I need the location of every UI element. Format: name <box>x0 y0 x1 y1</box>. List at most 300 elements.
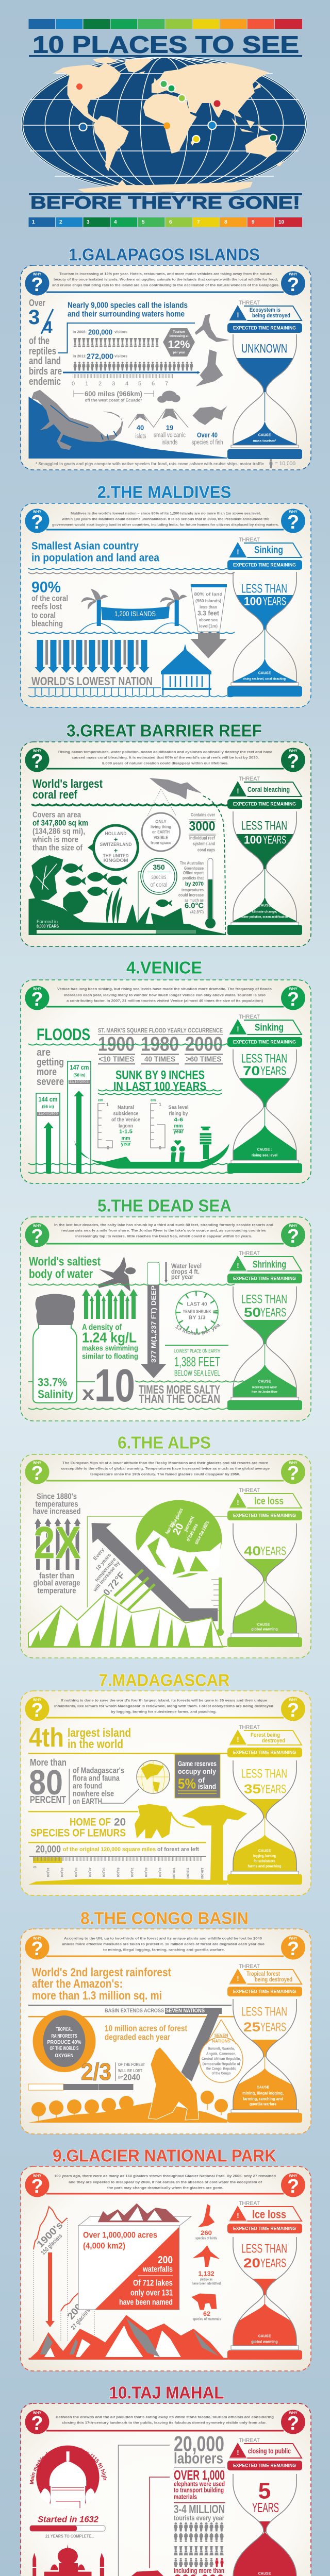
ground and iguana <box>28 390 227 459</box>
threat and hourglass: CAUSE <box>258 434 271 437</box>
forest remaining ruler: 40,000 <box>88 1868 91 1877</box>
forest remaining ruler: 80,000 <box>144 1868 147 1877</box>
two thirds stat: OF THE FOREST <box>118 2062 145 2067</box>
why banner: WHY <box>289 510 298 514</box>
heading: 7 Madagascar: 7.MADAGASCAR <box>99 1670 230 1690</box>
why banner: beauty of the once isolated islands. Workers smuggling animals to the islands that compete with the local wildlife for food, <box>54 278 278 281</box>
headline: World's 2nd largest rainforest <box>32 1965 171 1979</box>
hexagon: tourism increasing: Tourism <box>173 331 185 334</box>
2X temperatures: temperatures <box>35 1500 78 1509</box>
salt shaker: 33.7% <box>38 1376 67 1389</box>
threat and hourglass: YEARS <box>260 1545 286 1558</box>
forest remaining ruler: 70,000 <box>130 1868 133 1877</box>
clock: shrunk by a third: 13 inches per year <box>175 1324 221 1335</box>
why banner: and they are expected to disappear by 2030, if not earlier. In the absence of cold water the ecosystem of <box>69 2180 262 2184</box>
panel: Venice <box>21 980 311 1183</box>
threat and hourglass <box>227 1014 302 1173</box>
threat and hourglass: 50 <box>244 1306 261 1320</box>
4th largest island: largest island <box>68 1726 131 1739</box>
threat and hourglass: CAUSE <box>258 1850 271 1853</box>
rocket and dashed path <box>147 778 225 935</box>
water line <box>28 1044 235 1045</box>
park size box: (4,000 km2) <box>83 2241 125 2250</box>
speech oval: countries: KINGDOM <box>103 858 128 863</box>
stat: 3000 reef systems: individual reef <box>189 836 216 841</box>
clock: shrunk by a third: BY 1/3 <box>189 1315 206 1321</box>
circle: visible from space: from space <box>151 841 172 845</box>
threat and hourglass: destroyed <box>262 1738 285 1744</box>
threat and hourglass: CAUSE <box>258 2335 271 2338</box>
stat: three quarters endemic: birds are <box>29 366 62 377</box>
panel: The Alps <box>21 1454 311 1658</box>
forest remaining ruler: of the original 120,000 square miles <box>63 1846 156 1853</box>
clock: shrunk by a third: YEARS SHRUNK <box>183 1310 211 1314</box>
alpine mountains <box>28 1595 227 1647</box>
heading: 4 Venice: 4.VENICE <box>126 958 202 977</box>
threat and hourglass: Ice loss <box>254 1496 284 1507</box>
stat: 3000 reef systems: 3000 <box>189 819 216 834</box>
why banner: Rising ocean temperatures, water pollution, ocean acidification and cyclones continually destroy the reef and have <box>58 750 272 754</box>
headline: coral reef <box>32 788 77 801</box>
subsidence scales: 1 <box>106 1102 109 1107</box>
forest degraded text: degraded each year <box>105 2032 170 2042</box>
threat and hourglass: YEARS <box>260 2021 286 2034</box>
globe <box>137 1760 170 1793</box>
game reserves box: 5% <box>178 1775 196 1792</box>
numbered legend bar: 1 <box>32 219 35 225</box>
why banner: ? <box>31 2176 43 2197</box>
threat and hourglass: YEARS <box>260 1783 286 1796</box>
gondola <box>73 1127 229 1168</box>
why banner: inhabitants, like lemurs for which Madagascar is renowned, along with them. Forest ecosystems are being destroyed <box>54 1704 273 1708</box>
seven nations oval <box>200 2020 243 2082</box>
laborers and tourists stats: elephants were used <box>174 2480 225 2487</box>
threat and hourglass: farms and poaching <box>248 1865 282 1868</box>
heading: 6 The Alps: 6.THE ALPS <box>118 1433 211 1452</box>
stat: three quarters endemic <box>28 298 195 387</box>
threat and hourglass: EXPECTED TIME REMAINING <box>233 1989 296 1994</box>
numbered legend bar: 6 <box>169 219 172 225</box>
flood height columns: (56 in) <box>42 1105 54 1109</box>
threat and hourglass: 100 <box>244 595 262 608</box>
headline <box>32 777 103 801</box>
glacier text: of their area <box>185 1523 200 1543</box>
why banner: WHY <box>289 749 298 753</box>
park size box: Over 1,000,000 acres <box>83 2230 157 2240</box>
glacier text: percent <box>183 1515 196 1533</box>
footnote and legend: * Smuggled in goats and pigs compete with native species for food, rats come ashore with cruise ships, motor traffic <box>36 461 264 466</box>
why banner: 100 years ago, there were as many as 150 glaciers strewn throughout Glacier National Park. By 2005, only 27 remained <box>54 2174 276 2178</box>
depth arrow: 377 M(1,237 FT) DEEP <box>150 1285 157 1363</box>
species headline: and their surrounding waters home <box>68 310 185 318</box>
why banner: WHY <box>33 1698 41 1702</box>
dome illustration: Main marble dome is 35 meters (115 ft) high <box>30 2445 107 2484</box>
big gray arrow <box>91 1523 218 1621</box>
title: 10 PLACES TO SEE <box>32 31 299 58</box>
area text: than the size of <box>32 844 83 852</box>
threat and hourglass: THREAT <box>239 776 260 782</box>
wildlife icons: species of birds <box>195 2237 217 2240</box>
speech oval: countries <box>88 825 138 870</box>
why banner: ? <box>287 1938 299 1960</box>
threat and hourglass: closing to public <box>248 2447 291 2455</box>
threat and hourglass: rising sea level, coral bleaching <box>243 677 286 681</box>
construction timeline: 21 YEARS TO COMPLETE... <box>45 2534 94 2539</box>
threat and hourglass: YEARS <box>263 595 286 608</box>
threat and hourglass: THREAT <box>239 2437 260 2444</box>
threat and hourglass: for subsistence <box>254 1860 275 1863</box>
laborers and tourists stats: 20,000 <box>174 2432 224 2455</box>
arrow text: 0.72°F <box>92 1547 127 1598</box>
why banner: WHY <box>33 1937 41 1940</box>
speech oval: countries: + <box>114 847 118 854</box>
why banner <box>25 986 305 1010</box>
St Mark's Square occurrence: 40 TIMES <box>144 1055 175 1063</box>
St Mark's Square occurrence: >60 TIMES <box>186 1055 222 1063</box>
numbered legend bar: 3 <box>87 219 90 225</box>
headline: more than 1.3 million sq. mi <box>32 1989 162 2002</box>
glacier loss chart: 27 glaciers <box>70 2307 92 2331</box>
panel: Madagascar <box>21 1691 311 1895</box>
threat and hourglass: THREAT <box>239 1250 260 1257</box>
subsidence scales: mm <box>122 1136 130 1142</box>
floods headline: FLOODS <box>37 1025 90 1044</box>
oxygen circle <box>33 2010 96 2072</box>
subsidence scales: cm <box>151 1098 156 1103</box>
2X temperatures: temperature <box>37 1587 76 1595</box>
threat and hourglass: global warming <box>251 1628 278 1631</box>
visitor pictograms <box>73 328 193 371</box>
seven nations oval: of the Congo <box>211 2072 231 2075</box>
threat and hourglass: ! <box>237 1261 239 1269</box>
water level drop: per year <box>171 1273 193 1281</box>
depth arrow <box>141 1262 166 1378</box>
why banner: restaurants nearly a mile from shore. The Jordan River is the lake's sole source and, as surrounding countries <box>61 1229 266 1232</box>
seven nations band and numeral: BASIN EXTENDS ACROSS <box>105 2008 164 2014</box>
sunk by 9 inches: IN LAST 100 YEARS <box>113 1080 206 1093</box>
threat and hourglass: YEARS <box>260 2257 286 2270</box>
subsidence scales: lagoon <box>119 1123 133 1129</box>
why banner: ? <box>287 1226 299 1247</box>
threat and hourglass: EXPECTED TIME REMAINING <box>233 2226 296 2231</box>
hexagon: tourism increasing: increasing at <box>169 335 189 338</box>
elevation arrow callout: less than <box>200 604 217 609</box>
4th largest island: in the world <box>68 1737 123 1751</box>
80 percent stat: PERCENT <box>30 1794 66 1806</box>
forest remaining ruler: of forest are left <box>157 1846 199 1853</box>
speech oval: countries: + <box>114 836 118 843</box>
stat: coral reefs lost: 90% <box>31 579 61 596</box>
distance scale: 0 <box>72 381 75 387</box>
circle: 350 species of coral: of coral <box>151 881 167 888</box>
why banner <box>25 748 305 772</box>
forest remaining ruler: 90,000 <box>158 1868 161 1877</box>
visitor pictograms: 272,000 <box>87 352 113 361</box>
threat and hourglass: guerilla warfare <box>250 2102 276 2106</box>
flood height columns <box>36 1061 91 1173</box>
salt shaker: Salinity <box>38 1388 74 1400</box>
threat and hourglass: EXPECTED TIME REMAINING <box>233 2463 296 2468</box>
headline: body of water <box>29 1267 93 1281</box>
threat and hourglass: EXPECTED TIME REMAINING <box>233 802 296 807</box>
2X temperatures: have increased <box>33 1507 80 1516</box>
elevation arrow callout: above sea <box>199 617 218 622</box>
timeline: formed in 8000 years <box>37 919 196 934</box>
forest remaining ruler: 20,000 <box>60 1868 63 1877</box>
headline: World's saltiest <box>29 1255 101 1268</box>
seven nations oval: Central African Republic, <box>202 2058 241 2061</box>
forest remaining ruler: 100,000 <box>172 1868 175 1879</box>
why banner: unless more effective measures are taken to protect it. 10 million acres of forest are degraded each year due <box>62 1942 265 1946</box>
lemur species: SPECIES OF LEMURS <box>30 1827 126 1839</box>
why banner: ? <box>287 989 299 1010</box>
threat and hourglass: LESS THAN <box>241 2242 287 2256</box>
heading: 9 Glacier National Park: 9.GLACIER NATIONAL PARK <box>53 2146 276 2165</box>
connector line red <box>150 2477 170 2568</box>
forest remaining ruler: 120,000 <box>200 1868 203 1879</box>
lemur and tree <box>135 1804 247 1880</box>
flood height columns: 11/16/2002 <box>69 1080 89 1084</box>
St Mark's Square occurrence: 1900 <box>98 1033 135 1055</box>
subsidence scales: of the Venice <box>111 1117 140 1123</box>
headline <box>31 540 159 564</box>
glacier text <box>164 1507 211 1546</box>
island and fish counts: islets <box>135 432 146 440</box>
panel: Galapagos Islands <box>21 265 311 470</box>
threat and hourglass: climate change, <box>252 910 277 914</box>
threat and hourglass: EXPECTED TIME REMAINING <box>233 1276 296 1281</box>
threat and hourglass: ! <box>237 1974 239 1982</box>
arrow text: 0.72°F: 0.72°F <box>101 1570 127 1598</box>
2X temperatures: Since 1880's <box>37 1492 77 1501</box>
game reserves box <box>175 1754 220 1798</box>
threat and hourglass: EXPECTED TIME REMAINING <box>233 1750 296 1755</box>
hexagon: tourism increasing <box>163 328 195 357</box>
thermometer <box>211 1578 224 1636</box>
why banner: ? <box>287 274 299 296</box>
why banner <box>25 2173 305 2197</box>
temperature forecast: 6.0°C <box>185 902 204 910</box>
game reserves box: Game reserves <box>178 1759 217 1768</box>
threat and hourglass: ! <box>237 1025 239 1033</box>
water level drop <box>164 1262 202 1283</box>
elevation arrow callout <box>190 584 227 658</box>
why banner <box>25 2410 305 2434</box>
x10 saltier: x <box>82 1383 94 1404</box>
lemur species: HOME OF <box>70 1817 111 1828</box>
clock: shrunk by a third: LAST 40 <box>187 1301 207 1308</box>
construction timeline <box>30 2514 105 2539</box>
distance scale: 7 <box>165 381 168 387</box>
wildlife icons: have been identified <box>192 2282 221 2285</box>
glacier loss chart: 150 glaciers <box>40 2232 64 2256</box>
temperature forecast: predicts that <box>183 875 204 880</box>
distance scale: 1 <box>85 381 88 387</box>
why banner: caused mass coral bleaching. It is estimated that 60% of the world's coral reefs will be lost by 2030. <box>72 756 259 759</box>
water lines <box>28 1381 259 1410</box>
overseas stat: Including more than <box>174 2566 224 2574</box>
threat and hourglass: UNKNOWN <box>241 342 287 355</box>
floods headline: are <box>37 1047 51 1058</box>
hexagon: tourism increasing: 12% <box>168 339 190 350</box>
threat and hourglass: Shrinking <box>253 1259 286 1270</box>
glacier text: Alpine glaciers <box>169 1507 185 1529</box>
threat and hourglass: THREAT <box>239 537 260 543</box>
subsidence scales: subsidence <box>113 1111 139 1117</box>
threat and hourglass: EXPECTED TIME REMAINING <box>233 326 296 331</box>
panel: The Dead Sea <box>20 1216 311 1421</box>
forest remaining ruler: 20,000 <box>36 1844 61 1855</box>
visitor pictograms: 200,000 <box>88 328 112 337</box>
threat and hourglass <box>227 2200 302 2360</box>
glacier loss chart: 1900's <box>35 2220 65 2250</box>
thermometer <box>205 858 216 928</box>
animals: lizard, eagle, fish <box>192 314 229 425</box>
numbered legend bar <box>29 217 302 227</box>
lowest place on earth: 1,388 FEET <box>174 1354 220 1369</box>
islands: volcanoes <box>128 391 188 428</box>
St Mark's Square occurrence: 1980 <box>141 1033 179 1055</box>
stat: coral reefs lost <box>31 579 68 629</box>
why banner: ? <box>287 2176 299 2197</box>
threat and hourglass <box>227 300 302 459</box>
threat and hourglass: Ice loss <box>252 2208 286 2221</box>
arrow text: 0.72°F: Every <box>92 1547 106 1562</box>
why banner <box>25 1697 305 1721</box>
why banner <box>25 1223 305 1247</box>
elevation arrow callout: level(1m) <box>199 623 218 629</box>
why banner: the park may change dramatically when the glaciers are gone. <box>107 2187 223 2190</box>
oxygen circle: OXYGEN <box>55 2053 73 2059</box>
St Mark's Square occurrence: <10 TIMES <box>99 1055 134 1063</box>
stat: three quarters endemic: 4 <box>43 318 53 336</box>
stat: coral reefs lost: reefs lost <box>31 603 62 611</box>
threat and hourglass <box>227 2437 302 2576</box>
stat: three quarters endemic: of the <box>29 335 50 347</box>
glacier loss chart: 2005 <box>65 2297 88 2322</box>
species headline <box>68 301 188 318</box>
2X temperatures: global average <box>33 1579 80 1588</box>
why banner: WHY <box>33 749 41 753</box>
heading: 8 The Congo Basin: 8.THE CONGO BASIN <box>80 1908 249 1928</box>
park size box <box>78 2204 191 2310</box>
why banner: temperature since the 19th century. The famed glaciers could disappear by 2050. <box>90 1472 240 1477</box>
circle: visible from space: on EARTH <box>152 829 170 835</box>
why banner: WHY <box>289 1937 298 1940</box>
St Mark's Square occurrence <box>98 1027 223 1064</box>
stat: 3000 reef systems: Contains over <box>191 812 215 818</box>
threat and hourglass: LESS THAN <box>241 1292 287 1307</box>
threat and hourglass <box>227 1487 302 1647</box>
distance scale: 2 <box>98 381 102 387</box>
lowest place on earth: BELOW SEA LEVEL <box>174 1369 220 1378</box>
numbered legend bar: 5 <box>142 219 145 225</box>
distance scale: 600 miles (966km) <box>85 389 142 398</box>
subsidence scales: Sea level <box>168 1105 189 1111</box>
sunk by 9 inches: SUNK BY 9 INCHES <box>116 1069 205 1082</box>
why banner: government would start buying land in other countries, including India, for future homes for citizens displaced by rising waters. <box>52 523 279 527</box>
visitor pictograms: visitors <box>114 331 127 334</box>
island and fish counts: Over 40 <box>197 431 218 439</box>
why banner <box>25 509 305 533</box>
park size box: waterfalls <box>142 2265 173 2274</box>
ground <box>28 1878 227 1885</box>
oxygen circle: TROPICAL <box>56 2026 73 2032</box>
threat and hourglass: THREAT <box>239 1014 260 1020</box>
why banner: WHY <box>289 2411 298 2415</box>
glacier text: have lost <box>164 1521 176 1535</box>
subsidence scales: 0 <box>107 1145 109 1150</box>
4th largest island <box>28 1723 227 1754</box>
distance scale: 3 <box>112 381 115 387</box>
wildlife icons: 1,132 <box>198 2270 214 2277</box>
seven nations band and numeral <box>28 2005 234 2081</box>
timeline: formed in 8000 years: 8,000 YEARS <box>37 924 59 928</box>
threat and hourglass <box>227 537 302 697</box>
game reserves box: island <box>198 1782 216 1790</box>
stat: 3000 reef systems <box>189 812 216 853</box>
threat and hourglass: from the Jordan River <box>252 1390 277 1394</box>
threat and hourglass: 25 <box>243 2020 260 2035</box>
palms and banner <box>79 589 190 633</box>
why banner: to mining, illegal logging, farming, ranching and guerilla warfare. <box>103 1948 225 1952</box>
threat and hourglass: THREAT <box>239 1487 260 1494</box>
threat and hourglass: EXPECTED TIME REMAINING <box>233 1513 296 1518</box>
dome illustration <box>30 2445 107 2509</box>
pier and hut <box>28 644 235 697</box>
circle: 350 species of coral: 350 <box>153 863 165 871</box>
why banner: ? <box>31 274 43 296</box>
density text: A density of <box>82 1322 122 1332</box>
elevation arrow callout: 80% of land <box>194 591 223 597</box>
overseas stat <box>174 2566 224 2576</box>
threat and hourglass: CAUSE <box>257 1623 270 1627</box>
waves <box>28 568 235 574</box>
gorilla <box>148 2047 199 2120</box>
why banner: WHY <box>33 1461 41 1465</box>
forest remaining ruler: 0 <box>32 1866 37 1869</box>
footnote and legend: = 10,000 <box>275 461 295 467</box>
forest remaining ruler: 30,000 <box>74 1868 77 1877</box>
subsidence scales: cm <box>98 1098 103 1103</box>
temperature forecast: by 2070 <box>185 881 204 887</box>
distance scale: 5 <box>138 381 141 387</box>
threat and hourglass: THREAT <box>239 1963 260 1970</box>
lowest place on earth: LOWEST PLACE ON EARTH <box>174 1349 220 1354</box>
seven nations oval: SEVEN <box>214 2033 228 2038</box>
numbered legend bar: 2 <box>59 219 62 225</box>
numbered legend bar: 7 <box>197 219 200 225</box>
numbered legend bar: 4 <box>114 219 117 225</box>
glacier circle <box>87 1500 227 1607</box>
glacier text: 20 <box>171 1521 186 1537</box>
distance scale <box>63 371 200 403</box>
threat and hourglass: ! <box>237 2211 239 2219</box>
arrow text: 0.72°F: temperature <box>94 1556 118 1583</box>
why banner: WHY <box>289 1224 298 1228</box>
St Mark's Square occurrence: ST. MARK'S SQUARE FLOOD YEARLY OCCURRENCE <box>98 1027 223 1034</box>
mountains <box>28 2315 228 2360</box>
visitor pictograms: in 2008: <box>73 331 87 334</box>
why banner: WHY <box>33 2174 41 2178</box>
why banner: ? <box>31 1938 43 1960</box>
floating swimmer <box>98 1256 136 1292</box>
threat and hourglass: LESS THAN <box>241 1052 287 1065</box>
subsidence scales: 0 <box>159 1145 161 1150</box>
why banner: Between the crowds and the air pollution that's eating away its white stone facade, tourism officials are considering <box>56 2415 274 2419</box>
lowest place on earth <box>165 1345 228 1378</box>
stat: three quarters endemic: endemic <box>29 376 61 387</box>
